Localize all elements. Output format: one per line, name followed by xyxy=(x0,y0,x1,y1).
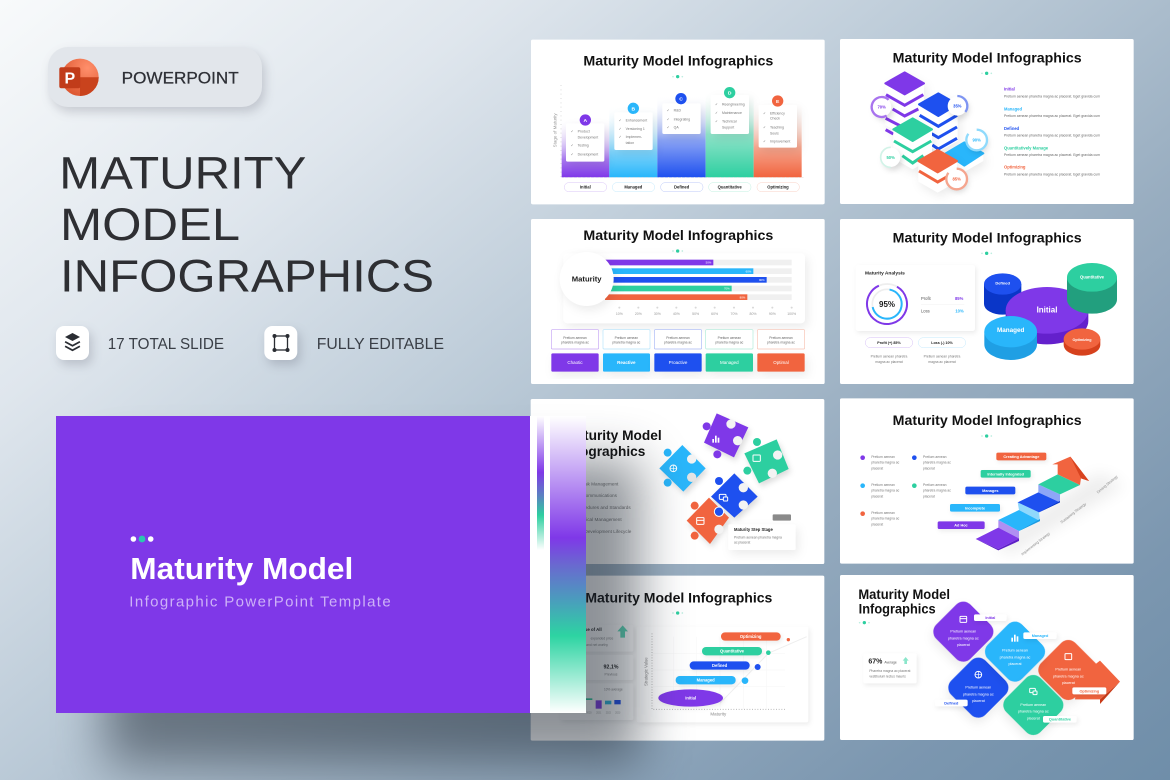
step labels xyxy=(938,453,1046,529)
heading: Maturity Model xyxy=(565,427,662,443)
stage C card: Integrating xyxy=(674,117,690,121)
feature: fully editable: FULLY EDITABLE xyxy=(317,336,444,353)
heading: Maturity Model Infographics xyxy=(893,412,1082,428)
puzzle: green xyxy=(743,438,789,483)
chart card xyxy=(637,627,808,722)
stats column: and net worthy xyxy=(586,643,608,647)
white tags: Managed xyxy=(1032,634,1049,638)
chart card: Strategic Value xyxy=(643,657,648,686)
stage descriptions: Initial xyxy=(1004,87,1015,92)
main title: MATURITY xyxy=(59,147,306,198)
stage pills: Quantitative xyxy=(718,185,742,190)
outlined text boxes xyxy=(551,330,805,349)
legend xyxy=(860,455,951,526)
bar chart: 50% xyxy=(692,312,699,316)
strategy axis labels xyxy=(1020,475,1119,556)
bar chart: 60% xyxy=(711,312,718,316)
topic list: Development Lifecycle xyxy=(584,529,632,534)
maturity pills: Quantitative xyxy=(720,649,745,654)
cylinder: Initial: Initial xyxy=(1037,306,1057,315)
bar chart: 70% xyxy=(724,287,730,291)
bar chart: 90% xyxy=(759,278,765,282)
bar chart: 30% xyxy=(654,312,661,316)
stage B card: Enhancement xyxy=(626,118,647,122)
title dots xyxy=(672,249,683,253)
legend: Pretium aenean xyxy=(923,483,947,487)
purple diamond: pharetra magna ac xyxy=(948,636,979,640)
stage D card: ✓ xyxy=(715,111,718,115)
panel: slide 2 isometric stacks xyxy=(840,39,1134,204)
main title: MODEL xyxy=(60,199,240,250)
heading: Infographics xyxy=(563,443,646,459)
plot dots xyxy=(742,638,790,684)
main title: INFOGRAPHICS xyxy=(60,251,434,302)
light blue diamond: Pretium aenean xyxy=(1002,649,1028,653)
title dots xyxy=(672,75,683,78)
stats column: Value of All xyxy=(578,627,602,632)
stat card xyxy=(863,653,917,683)
callout card: Maturity Step Stage xyxy=(734,527,773,532)
white tags: Optimizing xyxy=(1079,689,1100,693)
percent rings: 85% xyxy=(953,177,961,182)
title dots xyxy=(981,72,992,75)
profit and loss pills: Profit (+) 85% xyxy=(877,341,901,345)
step labels: Ad Hoc xyxy=(954,524,969,528)
profit and loss pills: Pretium aenean pharetra xyxy=(924,354,961,358)
stage A card: ✓ xyxy=(571,152,574,156)
icon: PowerPoint logo: P xyxy=(64,70,75,88)
drop shadow of cover slide xyxy=(105,460,640,765)
topic list: Risk Management xyxy=(581,482,619,487)
blue diamond xyxy=(944,653,1013,722)
analysis card: Loss xyxy=(921,308,930,313)
panel: slide 8 diamonds xyxy=(840,575,1134,740)
stage E card: Efficiency xyxy=(770,111,785,115)
panel: slide 4 analysis and cylinders xyxy=(840,219,1134,384)
light blue diamond: pharetra magna ac xyxy=(1000,655,1031,659)
box captions: pharetra magna ac xyxy=(715,341,744,345)
bar chart: 80% xyxy=(740,295,746,299)
stage descriptions: Managed xyxy=(1004,106,1022,111)
chart card: Maturity xyxy=(710,712,727,717)
blue diamond: Pretium aenean xyxy=(965,686,991,690)
title dots xyxy=(981,434,992,438)
badge: PowerPoint: POWERPOINT xyxy=(122,69,239,87)
stage A card: Testing xyxy=(578,144,589,148)
legend: Pretium aenean xyxy=(871,511,895,515)
blue diamond: pharetra magna ac xyxy=(963,692,994,696)
title dots xyxy=(859,621,870,624)
box captions: Pretium aenean xyxy=(615,336,638,340)
purple diamond: Pretium aenean xyxy=(950,630,976,634)
heading: Maturity Model xyxy=(858,586,950,602)
blue diamond: placerat xyxy=(972,699,985,703)
stats column: 10% average xyxy=(604,688,623,692)
callout card: ac placerat xyxy=(734,541,750,545)
stage C card: QA xyxy=(674,126,679,130)
box captions: Pretium aenean xyxy=(666,336,690,340)
profit and loss pills: Pretium aenean pharetra xyxy=(871,354,908,358)
strategy axis labels: Driving Strategy xyxy=(1096,475,1119,494)
cylinder: Managed xyxy=(984,316,1037,360)
gradient strip: wide xyxy=(550,416,586,713)
orange arrow diamond: pharetra magna ac xyxy=(1053,674,1084,678)
puzzle: purple xyxy=(703,413,748,458)
stage E card: ✓ xyxy=(763,111,766,115)
coloured buttons: Proactive xyxy=(669,360,688,365)
stage A card: ✓ xyxy=(571,144,574,148)
stage C card: C xyxy=(679,97,683,103)
strategy axis labels: Sustaining Strategy xyxy=(1060,502,1087,524)
purple stack xyxy=(885,72,924,136)
green stack xyxy=(893,118,932,169)
column chart: Stage of Maturity xyxy=(552,113,557,147)
puzzle: blue xyxy=(711,473,758,518)
title dots xyxy=(981,252,992,255)
coloured buttons: Optimal xyxy=(773,360,789,365)
stage B card: tation xyxy=(626,141,634,145)
stats column xyxy=(560,625,633,720)
stage B card xyxy=(614,103,653,150)
strategy axis labels: Implementing Strategy xyxy=(1020,531,1051,556)
bar chart xyxy=(563,253,805,323)
stage descriptions: Optimizing xyxy=(1004,165,1026,170)
stage descriptions xyxy=(1004,87,1100,176)
cover dots xyxy=(131,536,154,542)
cylinder: Quantitative: Quantitative xyxy=(1080,274,1105,279)
icon: vector square xyxy=(272,334,290,352)
cover title: Maturity Model xyxy=(130,551,353,586)
stat card: 67% xyxy=(868,658,883,665)
stage A card: Product xyxy=(578,129,590,133)
maturity pills: Initial xyxy=(685,695,696,700)
stage descriptions: Pretium aenean pharetra magna ac placerat. Eget gravida cum xyxy=(1004,134,1100,138)
icon: PowerPoint logo xyxy=(59,59,99,96)
bar chart: 90% xyxy=(769,312,776,316)
cylinder: Defined: Defined xyxy=(995,281,1011,286)
maturity pills xyxy=(658,632,781,707)
stage descriptions: Pretium aenean pharetra magna ac placerat. Eget gravida cum xyxy=(1004,172,1100,176)
icon: green up arrow xyxy=(617,625,628,638)
donut chart: 95% xyxy=(879,300,895,309)
percent rings: 50% xyxy=(887,155,895,160)
percent rings xyxy=(868,93,987,189)
stage B card: Implemen- xyxy=(626,135,642,139)
stage E card: Check xyxy=(770,117,780,121)
green diamond xyxy=(999,671,1068,739)
topic list: Communications xyxy=(582,493,618,498)
stats column: 92,1% xyxy=(603,664,619,670)
cylinder: Optimizing xyxy=(1064,328,1100,356)
maturity circle: Maturity xyxy=(572,275,602,284)
legend: Pretium aenean xyxy=(871,483,895,487)
cylinder: Initial xyxy=(1006,287,1088,344)
icon: layers xyxy=(65,333,80,351)
step labels: Incomplete xyxy=(965,506,985,510)
coloured buttons: Reactive xyxy=(617,360,636,365)
heading: Maturity Model Infographics xyxy=(583,227,774,243)
stage B card: Versioning 1 xyxy=(626,127,645,131)
legend: placerat xyxy=(871,494,883,498)
stage A card xyxy=(566,114,604,162)
legend: placerat xyxy=(871,522,883,526)
stage descriptions: Pretium aenean pharetra magna ac placerat. Eget gravida cum xyxy=(1004,94,1100,98)
box captions: Pretium aenean xyxy=(769,336,793,340)
stage B card: ✓ xyxy=(619,118,622,122)
white tags: Initial xyxy=(985,616,995,620)
bar chart: 100% xyxy=(787,312,796,316)
stat card: Average xyxy=(884,660,897,664)
stats column: Previous xyxy=(605,673,618,677)
main title xyxy=(59,147,434,302)
legend: placerat xyxy=(923,466,935,470)
stats column: 2021 xyxy=(596,713,602,715)
box captions xyxy=(561,336,795,345)
profit and loss pills: magna ac placerat xyxy=(875,360,903,364)
bar chart: 50% xyxy=(706,261,712,265)
panel: slide 7 value chart xyxy=(531,576,824,741)
heading: Maturity Model Infographics xyxy=(585,589,773,605)
bar chart: 80% xyxy=(750,312,756,316)
purple diamond: placerat xyxy=(957,643,970,647)
light blue tile xyxy=(946,142,983,172)
staircase arrow xyxy=(976,457,1125,555)
profit and loss pills: magna ac placerat xyxy=(928,360,956,364)
panel: slide 6 staircase xyxy=(840,398,1134,564)
heading: Maturity Model Infographics xyxy=(583,53,774,69)
box captions: pharetra magna ac xyxy=(561,341,589,345)
stage A card: ✓ xyxy=(571,129,574,133)
legend: placerat xyxy=(871,466,883,470)
column chart xyxy=(552,85,807,177)
green diamond: placerat xyxy=(1027,716,1040,720)
stage pills: Managed xyxy=(624,185,643,190)
profit and loss pills xyxy=(865,338,966,364)
feature: 17 total slide: 17 TOTAL SLIDE xyxy=(108,336,224,353)
legend: pharetra magna ac xyxy=(871,489,900,493)
step labels: Creating Advantage xyxy=(1003,455,1039,459)
light blue diamond: placerat xyxy=(1008,662,1022,666)
feature: 17 total slide xyxy=(56,326,224,360)
heading: Maturity Model Infographics xyxy=(893,50,1082,66)
analysis card: Maturity Analysis xyxy=(865,270,905,276)
stage C card: ✓ xyxy=(667,109,670,113)
green diamond: Pretium aenean xyxy=(1020,703,1046,707)
cover subtitle: Infographic PowerPoint Template xyxy=(129,594,391,611)
legend: pharetra magna ac xyxy=(923,461,951,465)
stage descriptions: Defined xyxy=(1004,126,1020,131)
icon: green up arrow xyxy=(903,657,909,664)
bar chart: 40% xyxy=(673,312,680,316)
badge: PowerPoint xyxy=(48,47,262,107)
stage E card: Souls xyxy=(770,131,779,135)
stage E card: E xyxy=(776,99,780,105)
cylinder: Quantitative xyxy=(1067,263,1117,314)
stat card: Pharetra magna ac placerat xyxy=(869,669,910,673)
analysis card: 10% xyxy=(955,308,964,313)
stage D card: D xyxy=(728,91,732,97)
stage E card: ✓ xyxy=(763,125,766,129)
heading xyxy=(563,427,662,459)
stage descriptions: Quantitatively Manage xyxy=(1004,145,1049,150)
bar chart: 70% xyxy=(731,312,737,316)
stage A card: Development xyxy=(578,135,598,139)
orange arrow diamond: Pretium aenean xyxy=(1055,668,1081,672)
bar chart: 20% xyxy=(635,312,642,316)
coloured buttons: Chaotic xyxy=(567,360,583,365)
step labels: Internally Integrated xyxy=(987,472,1025,476)
stage E card: Improvement xyxy=(770,139,790,143)
purple diamond xyxy=(929,597,998,666)
cover slide xyxy=(56,416,586,713)
analysis card: 85% xyxy=(955,296,964,301)
stage D card: Support xyxy=(722,126,734,130)
heading: Maturity Model Infographics xyxy=(893,230,1082,246)
stat card: vestibulum lectus mauris xyxy=(869,675,906,679)
maturity circle xyxy=(560,252,614,306)
heading: Infographics xyxy=(859,601,936,617)
blue stack xyxy=(919,93,958,152)
percent rings: 35% xyxy=(953,104,962,109)
legend: pharetra magna ac xyxy=(871,461,900,465)
stats column: 2020 xyxy=(586,713,592,715)
cylinder: Defined xyxy=(984,273,1021,315)
coloured buttons: Managed xyxy=(720,360,739,365)
panel: slide 5 puzzle xyxy=(531,399,824,564)
stage C card: ✓ xyxy=(667,126,670,130)
maturity pills: Optimizing xyxy=(740,634,762,639)
coloured buttons xyxy=(551,353,805,372)
stage pills: Initial xyxy=(580,185,591,190)
title dots xyxy=(672,611,683,615)
orange arrow diamond xyxy=(1034,636,1120,704)
legend: pharetra magna ac xyxy=(923,489,951,493)
box captions: Pretium aenean xyxy=(563,336,587,340)
stage descriptions: Pretium aenean pharetra magna ac placerat. Eget gravida cum xyxy=(1004,153,1100,157)
stage A card: A xyxy=(584,118,588,124)
stage B card: ✓ xyxy=(619,135,622,139)
stage D card xyxy=(711,87,749,134)
panel: slide 1 stage columns xyxy=(531,40,825,204)
box captions: Pretium aenean xyxy=(718,336,741,340)
panel: slide 3 maturity bars xyxy=(531,219,825,384)
legend: Pretium aenean xyxy=(923,455,947,459)
stage E card: Teaching xyxy=(770,125,784,129)
green diamond: pharetra magna ac xyxy=(1018,710,1049,714)
stage pills: Optimizing xyxy=(767,185,789,190)
stage B card: ✓ xyxy=(619,127,622,131)
stage pills: Defined xyxy=(674,185,690,190)
stage E card: ✓ xyxy=(763,139,766,143)
topic list: Procedures and Standards xyxy=(575,505,631,510)
white tags: Defined xyxy=(944,701,959,705)
analysis card xyxy=(856,265,975,331)
light blue diamond xyxy=(981,617,1049,686)
stage C card xyxy=(662,93,701,134)
maturity pills: Managed xyxy=(697,678,715,683)
puzzle: orange xyxy=(687,498,729,544)
feature: fully editable xyxy=(264,326,444,360)
legend: Pretium aenean xyxy=(871,455,895,459)
heading xyxy=(858,586,950,617)
bar chart: 60% xyxy=(746,269,752,273)
stage E card xyxy=(759,95,797,148)
callout card: Pretium aenean pharetra magna xyxy=(734,535,782,539)
percent rings: 90% xyxy=(973,138,981,143)
stage A card: Development xyxy=(578,152,598,156)
percent rings: 70% xyxy=(878,105,886,110)
stage D card: Technical xyxy=(722,120,737,124)
box captions: pharetra magna ac xyxy=(767,341,795,345)
stage pills xyxy=(564,183,799,192)
stage descriptions: Pretium aenean pharetra magna ac placerat. Eget gravida cum xyxy=(1004,114,1100,118)
cylinder: Managed: Managed xyxy=(997,327,1025,334)
box captions: pharetra magna ac xyxy=(664,341,692,345)
analysis card: Profit xyxy=(921,296,932,301)
maturity pills: Defined xyxy=(712,663,728,668)
step labels: Manages xyxy=(982,489,999,493)
bar chart: 10% xyxy=(616,312,623,316)
white tags xyxy=(935,614,1106,723)
topic list xyxy=(574,482,632,534)
stage D card: Maintenance xyxy=(722,111,742,115)
orange arrow diamond: placerat xyxy=(1062,681,1075,685)
stats column: 2022 xyxy=(606,713,612,715)
box captions: pharetra magna ac xyxy=(612,341,641,345)
white tags: Quantitative xyxy=(1049,718,1071,722)
stats column: expanded price xyxy=(591,636,613,640)
stats column: 2023 xyxy=(615,713,621,715)
topic list: Technical Management xyxy=(574,517,622,522)
stage D card: Reengineering xyxy=(722,103,745,107)
stage C card: R&D xyxy=(674,109,682,113)
stage C card: ✓ xyxy=(667,117,670,121)
profit and loss pills: Loss (-) 10% xyxy=(931,341,954,345)
orange stack xyxy=(918,150,957,193)
legend: pharetra magna ac xyxy=(871,517,900,521)
puzzle: light blue xyxy=(659,445,706,492)
callout card xyxy=(728,514,796,550)
stage B card: B xyxy=(632,106,636,112)
legend: placerat xyxy=(923,494,935,498)
gradient strip: thin xyxy=(537,416,544,550)
stage D card: ✓ xyxy=(715,103,718,107)
cylinder: Optimizing: Optimizing xyxy=(1073,338,1091,342)
stage D card: ✓ xyxy=(715,120,718,124)
